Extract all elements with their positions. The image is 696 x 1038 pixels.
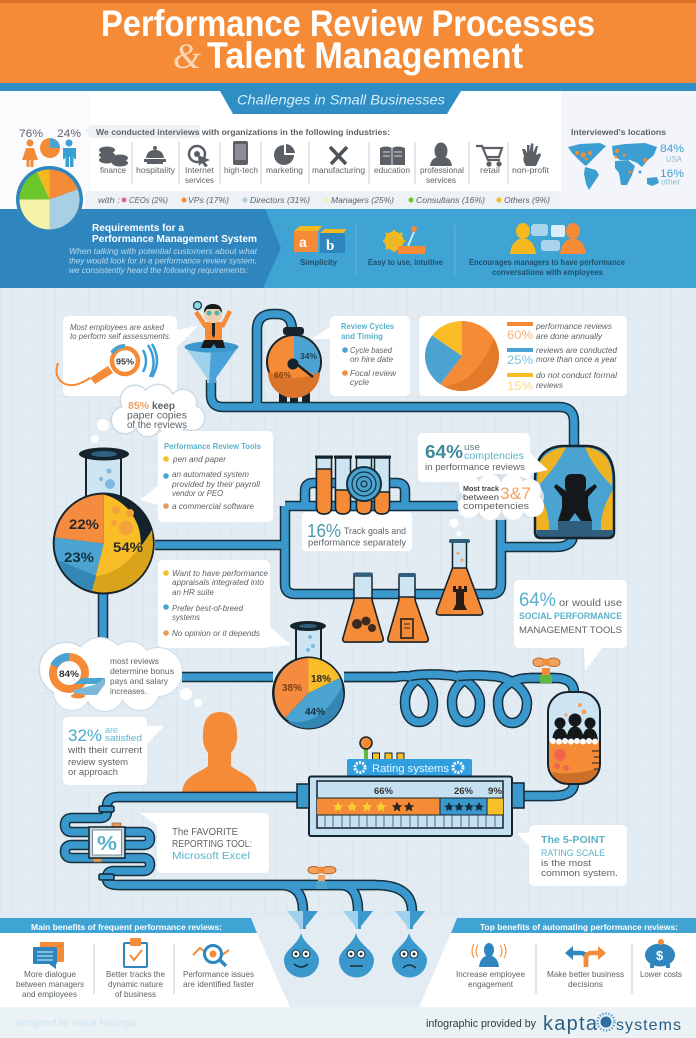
valve: coil — [533, 658, 560, 683]
requirements band — [0, 209, 696, 288]
callout: social performance tools: 64% — [519, 590, 556, 611]
industries row: marketing — [266, 165, 303, 175]
process pipes — [65, 314, 574, 877]
happy drop — [284, 933, 319, 978]
stage with curtains — [535, 446, 614, 538]
industries row: services — [426, 175, 456, 185]
callout: social performance tools: or would use — [559, 598, 622, 609]
gender split: 24% — [57, 128, 81, 140]
callout: favorite reporting tool — [140, 813, 269, 873]
respondents legend: VPs (17%) — [188, 195, 229, 205]
icon: percent box: % — [97, 833, 117, 855]
callout: social performance tools: MANAGEMENT TOOLS — [519, 625, 622, 636]
pipe coil — [344, 672, 574, 723]
panel: automation benefits — [451, 918, 696, 989]
icon: high-tech phone — [233, 141, 248, 165]
large respondents pie — [16, 166, 83, 233]
header banner — [0, 0, 696, 91]
panel: main benefits: Better tracks the — [106, 969, 165, 979]
panel: automation benefits: decisions — [568, 979, 603, 989]
lower pipes — [107, 672, 574, 911]
thought cloud: paper copies: paper copies — [127, 410, 187, 422]
title: Talent Management — [207, 35, 523, 76]
gauge chart: review cycles: 34% — [300, 351, 317, 361]
pipe flanges — [99, 783, 524, 880]
thought cloud: paper copies — [91, 384, 206, 443]
callout: HR integration: systems — [172, 612, 201, 622]
callout: 32% satisfied: are — [105, 725, 118, 735]
benefit panels — [0, 918, 696, 1038]
requirements text: Performance Management System — [92, 234, 257, 245]
test tubes — [315, 456, 391, 514]
callout: 32% satisfied: with their current — [67, 745, 142, 756]
pie chart — [425, 321, 499, 391]
pressure tank — [548, 692, 600, 784]
icon: education book — [380, 146, 405, 165]
respondents legend: Others (9%) — [504, 195, 550, 205]
icon: reviewer character — [194, 302, 230, 348]
callout: performance review tools: an automated system — [172, 469, 249, 479]
flask: chess rook — [436, 539, 483, 615]
panel: main benefits: More dialogue — [24, 969, 76, 979]
gender split: 76% — [19, 128, 43, 140]
silhouettes — [552, 714, 598, 741]
callout: 64% use competencies: in performance reviews — [425, 462, 525, 473]
valve: bottom — [308, 866, 336, 889]
lever and indicator lights — [360, 737, 404, 760]
title: & — [173, 36, 201, 76]
panel: main benefits: of business — [115, 989, 156, 999]
small pie — [40, 138, 60, 158]
footer credits: kapta — [543, 1013, 598, 1035]
footer credits: infographic provided by — [426, 1018, 536, 1030]
rating tab — [347, 759, 472, 777]
pie legend — [507, 321, 618, 393]
flask: review tools pie: 23% — [64, 550, 94, 565]
callout: 64% use competencies: 64% — [425, 442, 463, 462]
callout: 32% satisfied: satisfied — [105, 733, 142, 744]
callout: 5-point rating scale: is the most — [541, 858, 591, 869]
callout: social performance tools: SOCIAL PERFORMANCE — [519, 611, 622, 621]
icon: 95% magnifier — [57, 344, 157, 385]
callout: 16% track goals: 16% — [307, 521, 341, 541]
respondents legend: with : — [98, 195, 121, 205]
funnels and drops — [284, 911, 427, 978]
flask: review tools pie: 22% — [69, 517, 99, 532]
panel: automation benefits: Top benefits of automating performance reviews: — [480, 922, 678, 932]
flask: HR preference pie — [272, 621, 345, 730]
requirements band: Encourages managers to have performance — [469, 257, 625, 267]
icon: finance — [99, 146, 128, 166]
callout: performance review tools: Performance Review Tools — [164, 441, 261, 451]
panel: automation benefits: Increase employee — [456, 969, 525, 979]
callout: 32% satisfied — [63, 717, 164, 785]
callout: HR integration: Want to have performance — [172, 568, 268, 578]
icon: non-profit hand — [522, 144, 541, 166]
thought cloud: 3 and 7 competencies: between — [463, 492, 499, 502]
pie legend: 15% — [507, 379, 533, 393]
donut 84% — [53, 657, 85, 689]
pie legend: 25% — [507, 353, 533, 367]
callout: review cycles: cycle — [350, 377, 369, 387]
funnel outlets — [287, 911, 425, 929]
flask: HR preference pie: 18% — [311, 674, 331, 685]
rating systems machine: 26% — [454, 786, 473, 796]
thought cloud: 3 and 7 competencies: competencies — [463, 501, 529, 512]
industries row: professional — [420, 165, 464, 175]
requirements text: Requirements for a — [92, 223, 184, 234]
callout: review cycles — [312, 316, 410, 396]
icon: retail cart — [476, 146, 502, 166]
rating tab: Rating systems — [372, 763, 449, 775]
icon: alphabet blocks: a — [299, 234, 307, 250]
thought cloud: 3 and 7 competencies: Most track — [463, 484, 500, 493]
icon: marketing — [274, 144, 295, 165]
callout: HR integration: Prefer best-of-breed — [172, 603, 243, 613]
rating systems machine — [309, 737, 512, 836]
map highlights — [575, 149, 647, 174]
callout: review cycles: and Timing — [341, 331, 383, 341]
logo: starburst — [598, 1014, 614, 1030]
requirements text: we consistently heard the following requirements: — [69, 266, 248, 275]
callout: performance review tools: pen and paper — [172, 454, 227, 464]
panel: main benefits: between managers — [16, 979, 84, 989]
pie legend: 60% — [507, 328, 533, 342]
callout: 32% satisfied: or approach — [68, 767, 118, 778]
pipe: manifold to funnels — [107, 880, 412, 911]
callout: review cycles: on hire date — [350, 354, 393, 364]
callout: self assessments: Most employees are asked — [70, 322, 164, 332]
industries row: finance — [100, 165, 126, 175]
callout: 64% use competencies: use — [464, 442, 480, 453]
thought cloud: 3 and 7 competencies: 3&7 — [500, 484, 531, 503]
pie legend: more than once a year — [536, 354, 618, 364]
icon: alphabet blocks: b — [326, 238, 334, 254]
thought cloud: 84% bonus pays: determine bonus — [110, 666, 174, 676]
subtitle ribbon: Challenges in Small Businesses — [237, 92, 445, 108]
thought cloud: paper copies: of the reviews — [127, 420, 187, 431]
industries row: services — [185, 175, 214, 185]
icon: internet — [189, 146, 210, 167]
industries row: manufacturing — [312, 165, 365, 175]
industries row: retail — [480, 165, 500, 175]
callout: self assessments — [57, 316, 198, 396]
thought cloud: paper copies: 85% — [128, 401, 149, 412]
industries row: education — [374, 165, 410, 175]
pipe: tank to machine — [524, 783, 574, 801]
callout: 5-point rating scale: common system. — [541, 868, 618, 879]
callout: performance review tools: provided by their payroll — [171, 479, 261, 489]
locations panel — [568, 127, 684, 190]
callout: HR integration: appraisals integrated into — [172, 577, 264, 587]
callout: HR integration: an HR suite — [172, 587, 214, 597]
icon: clipboard — [124, 938, 147, 967]
industries row: high-tech — [224, 165, 258, 175]
respondents legend: Consultans (16%) — [416, 195, 485, 205]
callout: HR integration — [158, 560, 291, 648]
requirements text: When talking with potential customers about what — [69, 247, 258, 256]
thought cloud: 84% bonus pays: most reviews — [110, 656, 159, 666]
callout: 32% satisfied: 32% — [68, 726, 102, 745]
callout: review cycles: Review Cycles — [341, 321, 394, 331]
flask: gears — [343, 572, 383, 642]
pie legend: reviews are conducted — [536, 345, 617, 355]
callout: 32% satisfied: review system — [68, 757, 128, 768]
thought cloud: 84% bonus pays: pays and salary — [110, 676, 169, 686]
pie legend: do not conduct formal — [536, 370, 618, 380]
flask: HR preference pie: 44% — [305, 707, 325, 718]
pie legend: are done annually — [536, 331, 603, 341]
panel: main benefits: Performance issues — [183, 969, 254, 979]
gauge chart: review cycles — [266, 327, 322, 402]
requirements band: Simplicity — [300, 257, 337, 267]
icon: decision arrows — [565, 946, 606, 967]
thought cloud: 84% bonus pays — [38, 637, 202, 712]
requirements text: they would look for in a performance review system, — [69, 256, 257, 266]
panel: automation benefits: Make better business — [547, 969, 624, 979]
callout: 64% use competencies — [418, 433, 548, 482]
icon: piggy bank — [645, 939, 675, 968]
thought cloud: 84% bonus pays: increases. — [110, 686, 147, 696]
icon: gear and joystick — [383, 226, 425, 254]
callout: review cycles: Focal review — [350, 368, 397, 378]
requirements band: conversations with employees — [492, 267, 603, 277]
respondents legend: Managers (25%) — [331, 195, 394, 205]
silhouette figure — [554, 474, 597, 521]
icon: manufacturing — [330, 147, 347, 164]
flask: HR preference pie: 38% — [282, 683, 302, 694]
flask: review tools pie — [53, 448, 155, 594]
title — [101, 3, 595, 76]
callout: performance review tools: vendor or PEO — [172, 488, 223, 498]
gauge chart: review cycles: 66% — [274, 370, 291, 380]
icon: hospitality — [144, 146, 166, 164]
locations panel: other — [661, 178, 680, 186]
callout: 16% track goals: performance separately — [308, 538, 406, 548]
gender split — [19, 128, 81, 167]
subtitle ribbon — [220, 91, 461, 114]
icon: 95% magnifier: 95% — [116, 356, 134, 366]
footer credits: designed by Ioana Halunga — [16, 1018, 136, 1029]
callout: 5-point rating scale — [517, 825, 627, 886]
panel: automation benefits: Lower costs — [640, 969, 682, 979]
callout: favorite reporting tool: REPORTING TOOL: — [172, 839, 252, 850]
world map — [568, 143, 659, 190]
pipe: machine to coil top — [107, 792, 297, 806]
industries row: hospitality — [136, 165, 176, 175]
panel: main benefits — [0, 918, 257, 999]
panel: main benefits: dynamic nature — [108, 979, 163, 989]
pipe: cloud to sphere — [182, 672, 273, 682]
panel: automation benefits: engagement — [468, 979, 514, 989]
industries row: non-profit — [512, 165, 550, 175]
requirements band: Easy to use, intuitive — [368, 257, 443, 267]
callout: HR integration: No opinion or it depends — [172, 628, 261, 638]
icon: funnel — [184, 342, 238, 383]
locations panel: 16% — [660, 168, 684, 180]
callout: 16% track goals: Track goals and — [344, 526, 406, 537]
respondents legend: CEOs (2%) — [129, 195, 168, 205]
icon: magnifier on trend — [193, 946, 229, 966]
callout: favorite reporting tool: Microsoft Excel — [172, 850, 250, 862]
flask: document — [388, 573, 428, 642]
interview heading: We conducted interviews with organizations in the following industries: — [96, 127, 390, 137]
industries row: Internet — [185, 165, 215, 175]
icon: engaged person — [472, 943, 506, 967]
callout: performance review tools — [140, 431, 273, 522]
respondents legend: Directors (31%) — [250, 195, 310, 205]
icon: woman — [22, 140, 38, 167]
pie legend: performance reviews — [535, 321, 613, 331]
rating systems machine: 9% — [488, 786, 502, 796]
icon: percent box — [89, 823, 125, 862]
icon: chat bubbles — [33, 942, 64, 969]
industries row — [99, 141, 550, 185]
icon: professional — [430, 142, 452, 166]
callout: favorite reporting tool: The FAVORITE — [172, 827, 238, 838]
panel: review frequency — [419, 316, 627, 396]
icon: conversation — [510, 223, 586, 254]
respondents legend — [98, 195, 550, 205]
callout: review cycles: Cycle based — [350, 345, 392, 355]
callout: self assessments: to perform self assessments. — [70, 331, 171, 341]
sad drop — [392, 933, 427, 978]
callout: 64% use competencies: comptencies — [464, 451, 524, 462]
icon: man — [63, 140, 76, 167]
stacked bar — [317, 798, 503, 815]
icon: alphabet blocks — [294, 226, 346, 254]
callout: 5-point rating scale: RATING SCALE — [541, 848, 605, 859]
callout: performance review tools: a commercial software — [172, 501, 254, 511]
icon: target gauge — [347, 467, 381, 501]
flask: review tools pie: 54% — [113, 540, 143, 555]
thought cloud: paper copies: keep — [152, 401, 175, 412]
footer credits — [16, 1013, 681, 1035]
locations panel: USA — [666, 155, 683, 164]
small thought bubbles — [450, 518, 462, 536]
locations panel: Interviewed's locations — [571, 127, 666, 137]
survey section background — [0, 91, 696, 209]
panel: main benefits: are identified faster — [183, 979, 254, 989]
icon: money stack — [71, 678, 105, 698]
thought cloud: 3 and 7 competencies — [450, 474, 544, 536]
icon: piggy bank: $ — [656, 948, 664, 963]
locations panel: 84% — [660, 143, 684, 155]
callout: 16% track goals — [302, 512, 412, 551]
requirements text — [69, 223, 258, 275]
pie legend: reviews — [536, 380, 564, 390]
callout: social performance tools — [514, 580, 627, 671]
panel: main benefits: Main benefits of frequent performance reviews: — [31, 922, 222, 932]
rating systems machine: 66% — [374, 786, 393, 796]
title: Performance Review Processes — [101, 3, 595, 44]
footer credits: systems — [616, 1017, 681, 1034]
neutral drop — [339, 933, 374, 978]
callout: 5-point rating scale: The 5-POINT — [541, 835, 605, 846]
scale ticks — [325, 815, 495, 828]
icon: orange person silhouette — [182, 712, 257, 792]
donut 84%: 84% — [59, 669, 79, 679]
panel: main benefits: and employees — [22, 989, 77, 999]
